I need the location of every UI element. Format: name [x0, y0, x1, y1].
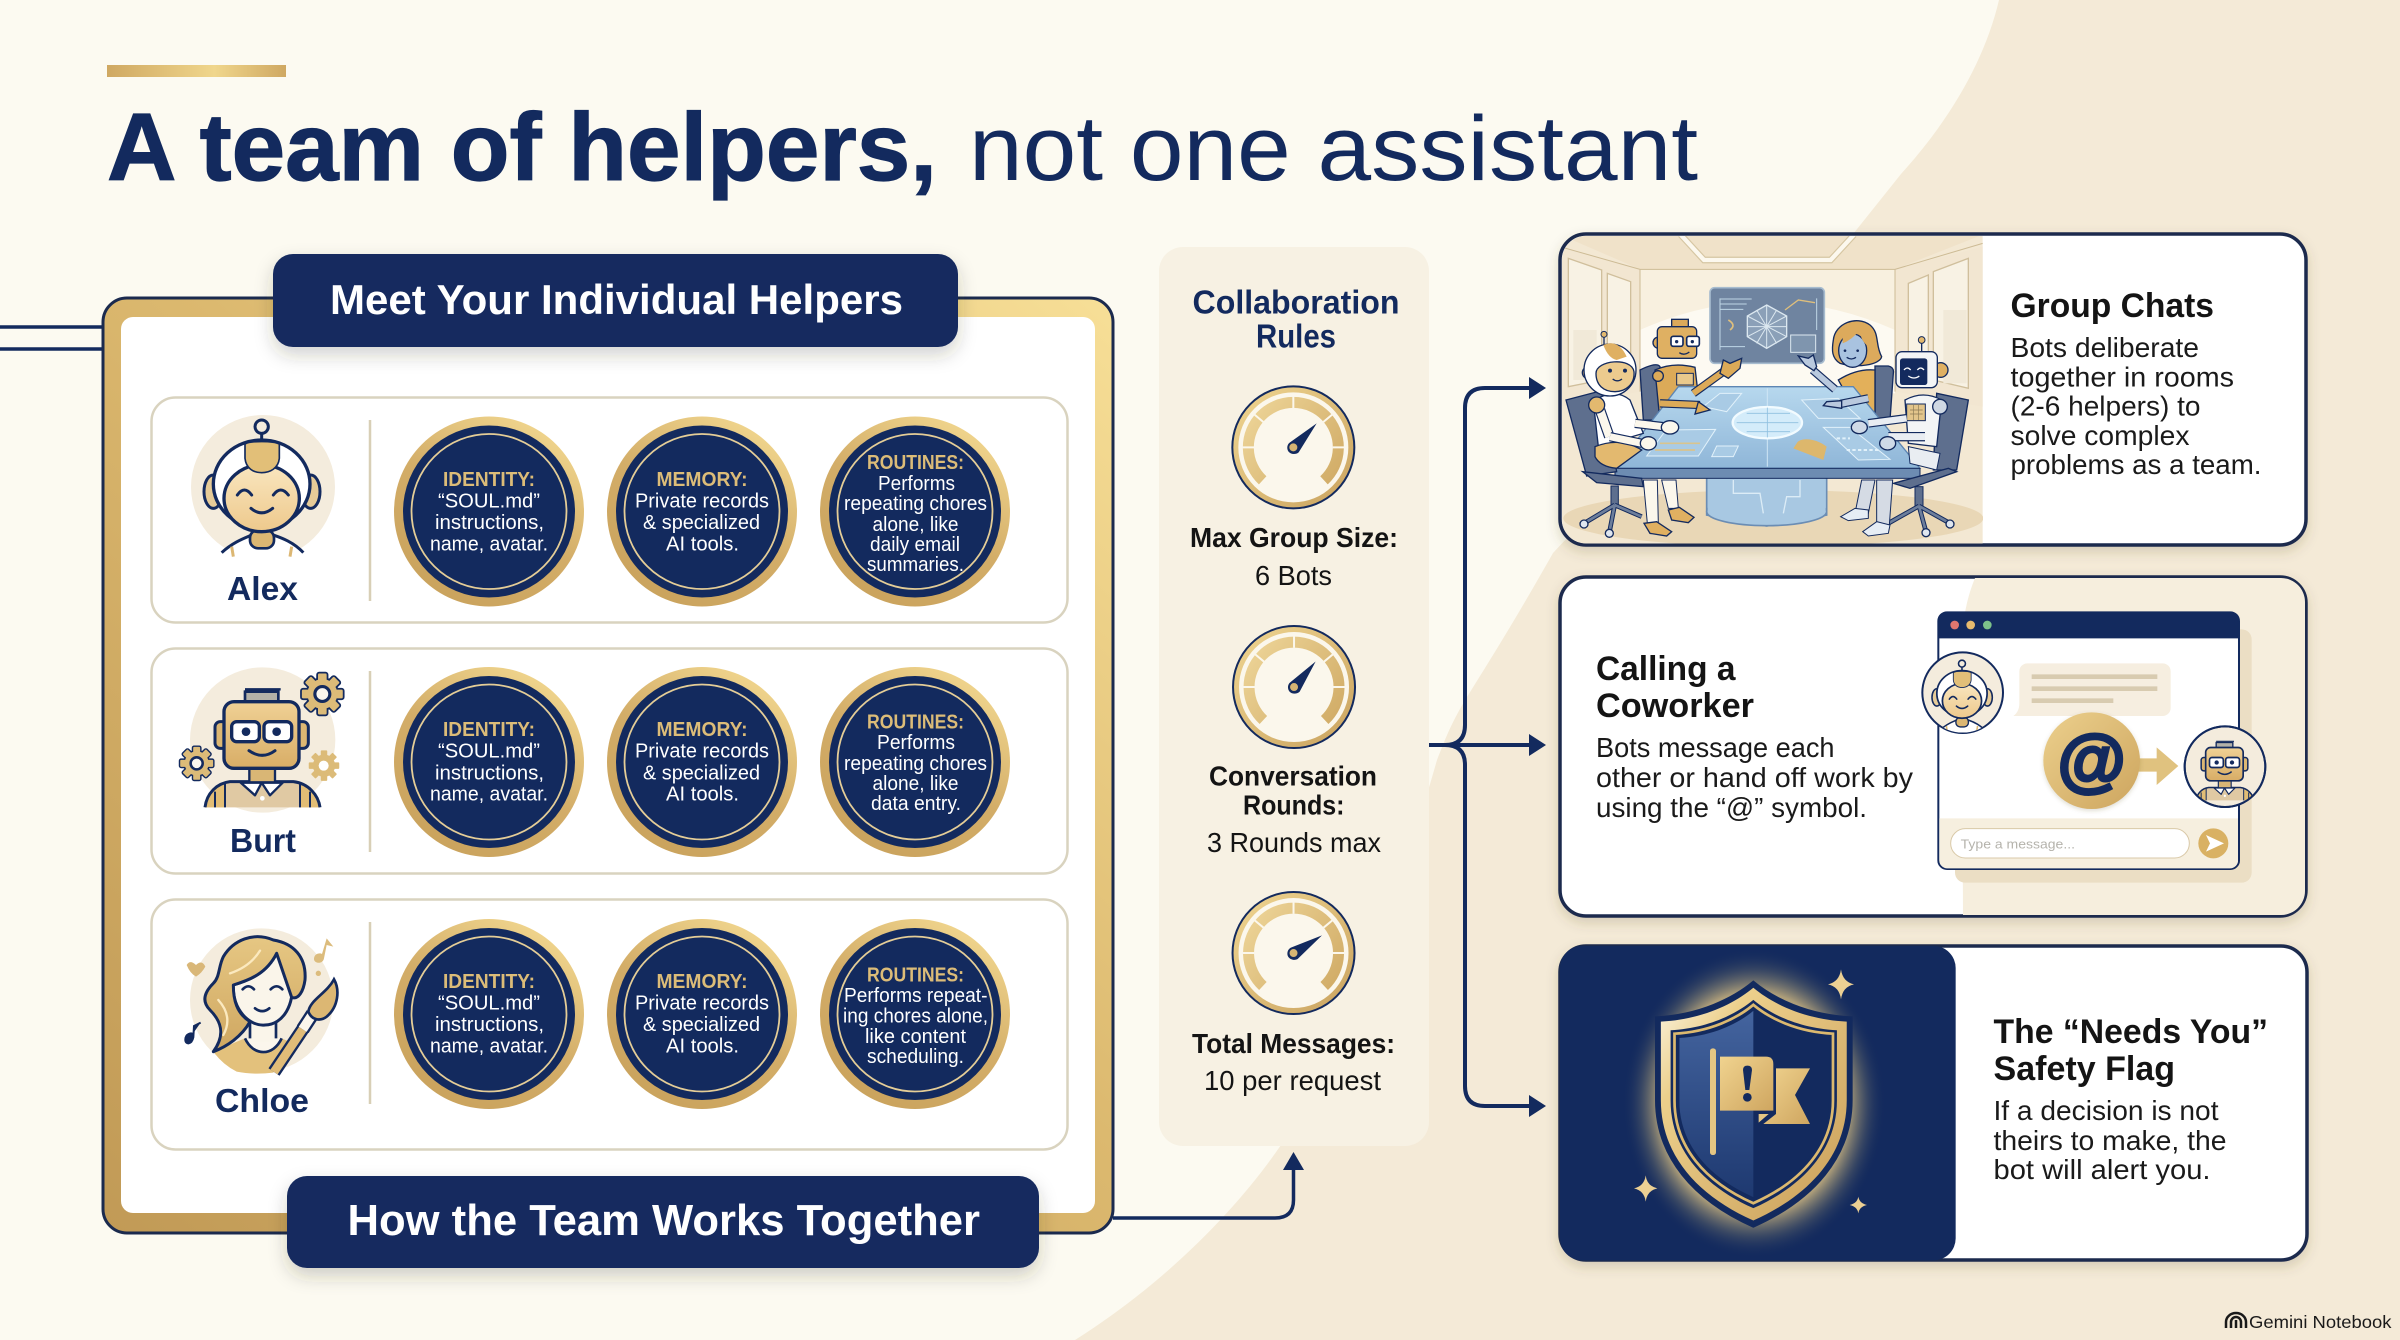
banner: how the team works together: How the Team Works Together: [348, 1196, 980, 1245]
row: Burt: [152, 648, 1068, 874]
gauge: max group size: [1232, 386, 1354, 508]
badge: identity: “SOUL.md”: [438, 740, 540, 762]
right chair: [1933, 393, 1968, 470]
coworker text: other or hand off work by: [1596, 762, 1913, 793]
rule: max group size: [1190, 522, 1398, 591]
table: [1707, 478, 1827, 526]
badge: memory: Private records: [635, 740, 769, 762]
illustration: chat window: @: [2058, 720, 2126, 798]
rule: conversation rounds: [1207, 760, 1381, 858]
coworker text: using the “@” symbol.: [1596, 792, 1867, 823]
badge: routines: [820, 919, 1010, 1109]
avatar: Alex: [191, 415, 335, 559]
badge: identity: instructions,: [435, 762, 544, 784]
badge: routines: repeating chores: [844, 493, 987, 515]
left robot: [1643, 480, 1658, 523]
background: tan swoosh: [1075, 0, 2400, 1340]
name: Alex: Alex: [227, 570, 299, 607]
badge: memory: AI tools.: [666, 534, 739, 556]
badge: memory: & specialized: [643, 512, 760, 534]
title accent bar: [107, 65, 286, 77]
rule: total messages: Total Messages:: [1192, 1028, 1395, 1059]
arrow: banner to rules: [1113, 1152, 1304, 1218]
card: needs you safety flag: [1560, 946, 2307, 1260]
coworker text: Coworker: [1596, 687, 1754, 725]
badge: routines: repeating chores: [844, 753, 987, 775]
coworker text: Bots message each: [1596, 732, 1834, 763]
badge: identity: name, avatar.: [430, 534, 548, 556]
badge: routines: [820, 667, 1010, 857]
group chats text: [2010, 287, 2262, 480]
badge: identity: IDENTITY:: [443, 469, 535, 491]
badge: memory: Private records: [635, 490, 769, 512]
badge: routines: alone, like: [872, 514, 958, 536]
illustration: shield and flag: [1560, 946, 1956, 1260]
rules heading: Rules: [1256, 318, 1336, 354]
left chair: [1566, 391, 1617, 476]
name: Burt: Burt: [230, 822, 296, 859]
rule: max group size: 6 Bots: [1255, 560, 1332, 591]
safety flag text: bot will alert you.: [1994, 1154, 2210, 1185]
badge: routines: alone, like: [872, 773, 958, 795]
badge: routines: daily email: [870, 534, 960, 556]
badge: routines: Performs repeat-: [844, 985, 988, 1007]
badge: routines: like content: [865, 1026, 966, 1048]
woman: [1832, 321, 1882, 366]
rule: total messages: 10 per request: [1204, 1065, 1381, 1096]
banner: meet your individual helpers: [273, 254, 958, 347]
rule: conversation rounds: 3 Rounds max: [1207, 827, 1381, 858]
row: Alex: [152, 398, 1068, 622]
badge: memory: [607, 416, 797, 606]
badge: memory: [607, 919, 797, 1109]
avatar: Chloe: [185, 928, 337, 1074]
safety flag text: The “Needs You”: [1994, 1013, 2268, 1051]
badge: memory: MEMORY:: [656, 971, 748, 993]
arms over table: woman: [1813, 370, 1835, 389]
footer: Gemini Notebook mark: Gemini Notebook: [2249, 1312, 2392, 1332]
badge: memory: [607, 667, 797, 857]
badge: routines: ROUTINES:: [867, 712, 964, 734]
badge: memory: & specialized: [643, 762, 760, 784]
avatar: Burt: [180, 667, 343, 813]
wall screen: [1710, 288, 1824, 363]
badge: memory: AI tools.: [666, 784, 739, 806]
safety flag text: [1994, 1013, 2268, 1185]
rule: total messages: [1192, 1028, 1395, 1096]
card: group chats: [1560, 230, 2306, 550]
banner: meet your individual helpers: Meet Your Individual Helpers: [330, 276, 903, 323]
badge: identity: “SOUL.md”: [438, 490, 540, 512]
arrows: rules to cards: [1429, 377, 1546, 1117]
connector: left double lines: [0, 327, 104, 349]
badge: identity: name, avatar.: [430, 1036, 548, 1058]
group chats text: solve complex: [2010, 420, 2190, 451]
panel: collaboration rules: [1159, 247, 1429, 1146]
badge: memory: & specialized: [643, 1014, 760, 1036]
badge: memory: MEMORY:: [656, 719, 748, 741]
group chats text: (2-6 helpers) to: [2010, 390, 2200, 422]
gauge: total messages: [1233, 892, 1355, 1014]
illustration: chat window: [1922, 612, 2265, 883]
group chats text: Group Chats: [2010, 287, 2214, 325]
illustration: robots around a meeting table: [1560, 230, 1983, 550]
row: Chloe: [152, 900, 1068, 1150]
panel: individual helpers: [103, 298, 1113, 1233]
title: [107, 94, 1698, 201]
rules heading: Collaboration: [1192, 284, 1400, 320]
arms over table: orange robot: [1660, 403, 1700, 405]
group chats text: problems as a team.: [2010, 449, 2262, 480]
badge: identity: IDENTITY:: [443, 719, 535, 741]
title: A team of helpers,: [107, 94, 937, 201]
badge: memory: AI tools.: [666, 1036, 739, 1058]
badge: routines: ing chores alone,: [843, 1006, 988, 1028]
rule: conversation rounds: Rounds:: [1243, 790, 1344, 820]
rules heading: [1192, 284, 1400, 354]
rule: conversation rounds: Conversation: [1209, 760, 1377, 792]
gauge: conversation rounds: [1233, 626, 1355, 748]
back chairs: [1640, 365, 1660, 420]
group chats text: Bots deliberate: [2010, 332, 2199, 363]
rule: max group size: Max Group Size:: [1190, 522, 1398, 553]
panel frame: [103, 298, 1113, 1233]
badge: identity: [394, 919, 584, 1109]
coworker text: [1596, 650, 1913, 823]
badge: routines: data entry.: [871, 793, 961, 815]
card: calling a coworker: [1560, 577, 2306, 916]
safety flag text: Safety Flag: [1994, 1050, 2175, 1088]
badge: identity: “SOUL.md”: [438, 992, 540, 1014]
banner: how the team works together: [287, 1176, 1039, 1268]
right robot: [1855, 480, 1875, 513]
badge: memory: MEMORY:: [656, 469, 748, 491]
badge: identity: [394, 667, 584, 857]
badge: routines: scheduling.: [867, 1046, 964, 1068]
badge: routines: ROUTINES:: [867, 964, 964, 986]
badge: identity: instructions,: [435, 512, 544, 534]
card tan backdrop: [1961, 578, 2305, 915]
badge: routines: Performs: [877, 732, 955, 754]
badge: memory: Private records: [635, 992, 769, 1014]
badge: identity: instructions,: [435, 1014, 544, 1036]
coworker text: Calling a: [1596, 650, 1737, 688]
badge: routines: Performs: [878, 473, 955, 495]
group chats text: together in rooms: [2010, 362, 2234, 392]
badge: identity: IDENTITY:: [443, 971, 535, 993]
safety flag text: theirs to make, the: [1994, 1125, 2226, 1156]
panel interior: [121, 317, 1095, 1213]
badge: identity: [394, 416, 584, 606]
badge: routines: [820, 416, 1010, 606]
illustration: chat window: Type a message...: [1961, 837, 2075, 851]
badge: identity: name, avatar.: [430, 784, 548, 806]
safety flag text: If a decision is not: [1994, 1095, 2219, 1126]
badge: routines: summaries.: [867, 554, 964, 576]
badge: routines: ROUTINES:: [867, 452, 964, 474]
title: not one assistant: [969, 98, 1698, 200]
name: Chloe: Chloe: [215, 1082, 309, 1119]
orange robot: [1672, 319, 1688, 327]
